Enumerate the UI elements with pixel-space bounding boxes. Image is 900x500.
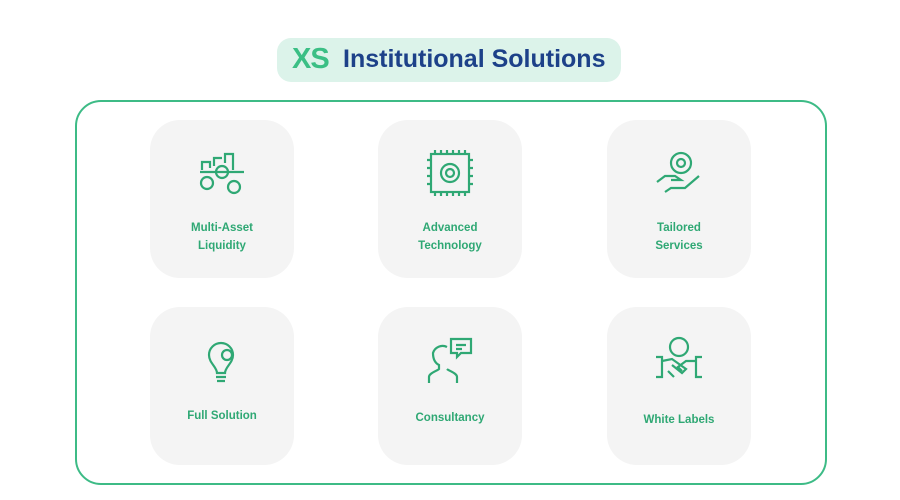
frame xyxy=(75,100,827,485)
card: white labels: White Labels xyxy=(644,414,714,426)
card: white labels xyxy=(607,307,751,465)
card: multi-asset liquidity xyxy=(150,120,294,278)
icon: hand gear xyxy=(656,152,700,193)
card: advanced technology: Advanced xyxy=(423,222,477,234)
card: full solution: Full Solution xyxy=(187,410,257,422)
icon: chart coins xyxy=(200,152,244,194)
title: Institutional Solutions xyxy=(343,45,605,73)
title: XS xyxy=(292,43,329,75)
card: multi-asset liquidity: Multi-Asset xyxy=(191,222,253,234)
card: consultancy: Consultancy xyxy=(415,412,484,424)
icon: chip gear xyxy=(427,150,473,196)
title xyxy=(277,38,621,82)
icon: bulb gear xyxy=(208,342,234,382)
card: tailored services: Tailored xyxy=(657,222,701,234)
card: full solution xyxy=(150,307,294,465)
card: multi-asset liquidity: Liquidity xyxy=(198,240,246,252)
card: tailored services: Services xyxy=(655,240,703,252)
card: tailored services xyxy=(607,120,751,278)
card: advanced technology: Technology xyxy=(418,240,482,252)
icon: handshake dollar xyxy=(656,336,702,378)
card: advanced technology xyxy=(378,120,522,278)
icon: person chat xyxy=(428,338,472,383)
card: consultancy xyxy=(378,307,522,465)
